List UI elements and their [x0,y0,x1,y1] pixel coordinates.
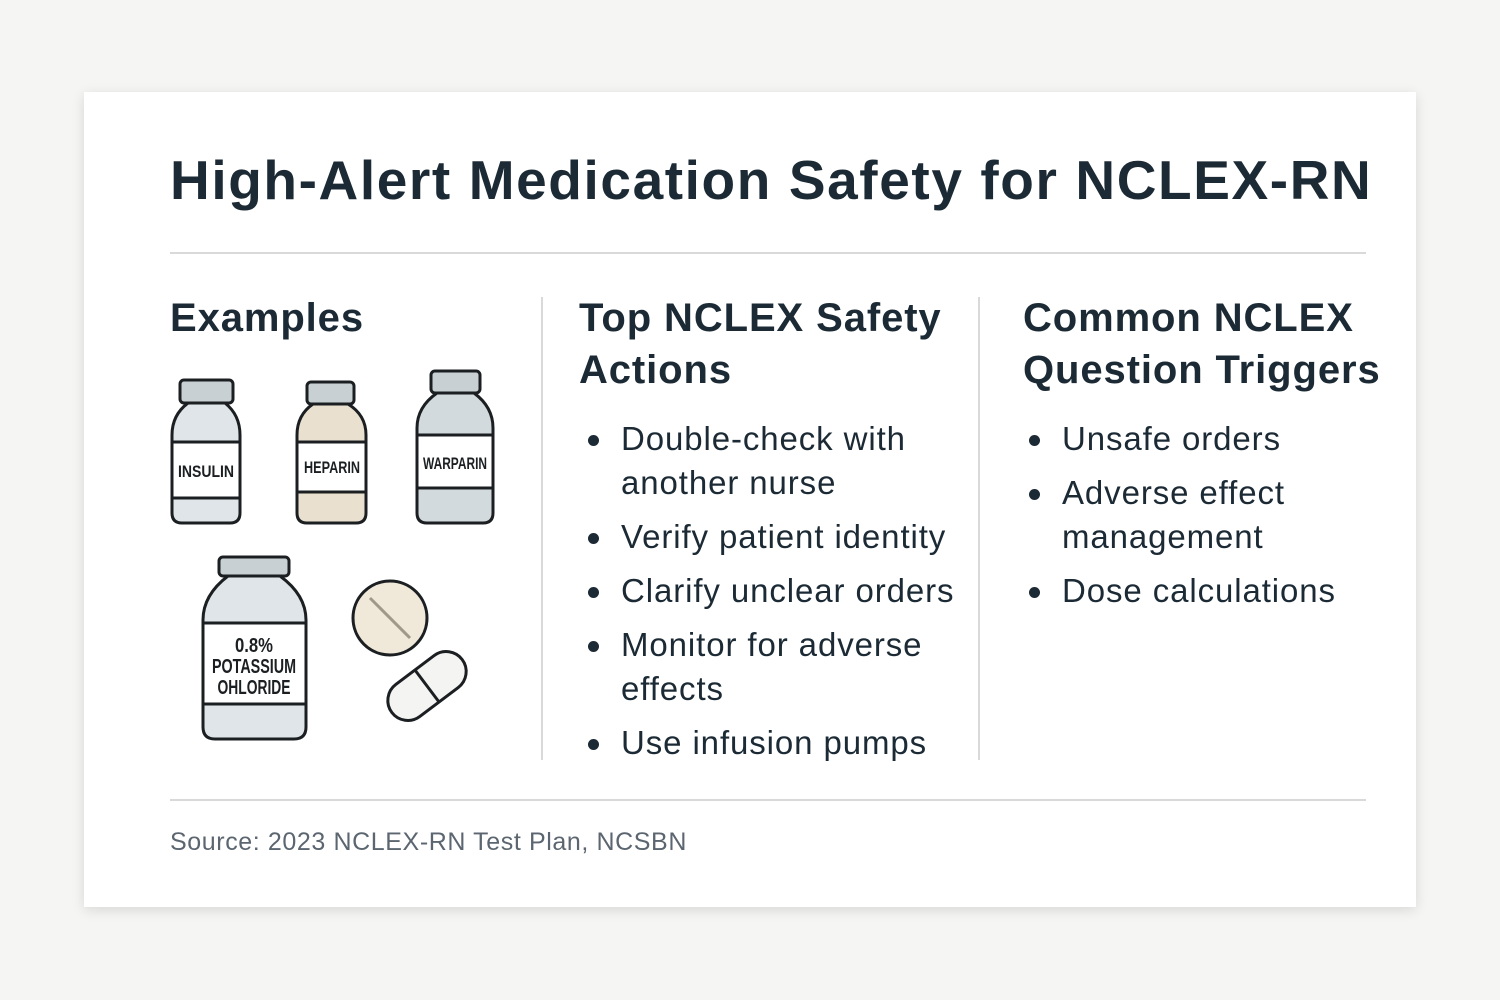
icon: warparin bottle [417,371,493,523]
icon: potassium chloride bottle: OHLORIDE [218,677,290,699]
card [84,92,1416,907]
heading: safety actions [579,296,942,392]
icon: insulin bottle [172,380,240,523]
icon: heparin bottle: HEPARIN [304,458,360,477]
icon: potassium chloride bottle: POTASSIUM [212,656,296,678]
icon: capsule [380,644,474,728]
icon: heparin bottle [297,382,366,523]
icon: potassium chloride bottle [203,557,306,739]
heading: examples: Examples [170,296,364,340]
list: question triggers: Adverse effect management [1062,474,1285,555]
list: safety actions [588,420,954,761]
heading: question triggers: Question Triggers [1023,348,1381,392]
icon: insulin bottle: INSULIN [178,462,234,481]
list: question triggers [1029,420,1336,609]
icon: tablet [353,581,427,655]
list: safety actions: Monitor for adverse effects [621,626,922,707]
list: question triggers: Dose calculations [1062,572,1336,609]
heading: safety actions: Top NCLEX Safety [579,296,942,340]
icon: potassium chloride bottle: 0.8% [235,635,273,657]
heading: question triggers: Common NCLEX [1023,296,1354,340]
list: safety actions: Verify patient identity [621,518,946,555]
icon: warparin bottle: WARPARIN [423,454,487,473]
list: safety actions: Clarify unclear orders [621,572,954,609]
list: question triggers: Unsafe orders [1062,420,1281,457]
title: High-Alert Medication Safety for NCLEX-RN [170,149,1372,211]
list: safety actions: Double-check with another nurse [621,420,906,501]
list: safety actions: Use infusion pumps [621,724,927,761]
source note: Source: 2023 NCLEX-RN Test Plan, NCSBN [170,828,687,856]
heading: question triggers [1023,296,1381,392]
heading: safety actions: Actions [579,348,732,392]
